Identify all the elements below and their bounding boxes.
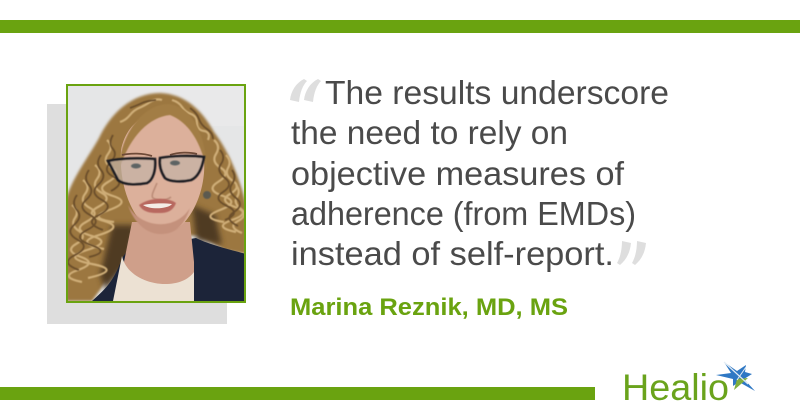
- glasses: [108, 156, 204, 184]
- quote text: The results underscore: [325, 74, 669, 111]
- portrait photo of Marina Reznik: [66, 85, 246, 302]
- earring: [203, 191, 211, 199]
- quote text: adherence (from EMDs): [291, 195, 636, 232]
- quote text: objective measures of: [291, 155, 625, 192]
- photo background: [68, 86, 244, 301]
- icon: star: [716, 362, 755, 391]
- jacket: [92, 238, 246, 301]
- nose: [152, 183, 171, 200]
- face: [121, 112, 204, 232]
- quote text: instead of self-report.: [291, 235, 614, 272]
- hair over forehead: [120, 108, 204, 164]
- eyes: [131, 164, 141, 168]
- eyebrows: [122, 153, 197, 156]
- Healio logo: Healio: [622, 366, 729, 408]
- gray offset panel behind photo: [47, 104, 227, 324]
- curls highlights: [69, 99, 244, 282]
- opening quotation mark: [290, 79, 321, 102]
- quote text: the need to rely on: [291, 114, 568, 151]
- blouse: [113, 256, 194, 301]
- hair mass: [66, 93, 246, 301]
- neck: [124, 222, 194, 284]
- closing quotation mark: [617, 241, 646, 265]
- top green bar: [0, 20, 800, 33]
- quote text: [291, 74, 669, 272]
- hair shadow under chin: [100, 205, 222, 290]
- attribution: Marina Reznik, MD, MS: [290, 294, 568, 321]
- bottom green bar: [0, 387, 595, 400]
- smile: [139, 199, 176, 213]
